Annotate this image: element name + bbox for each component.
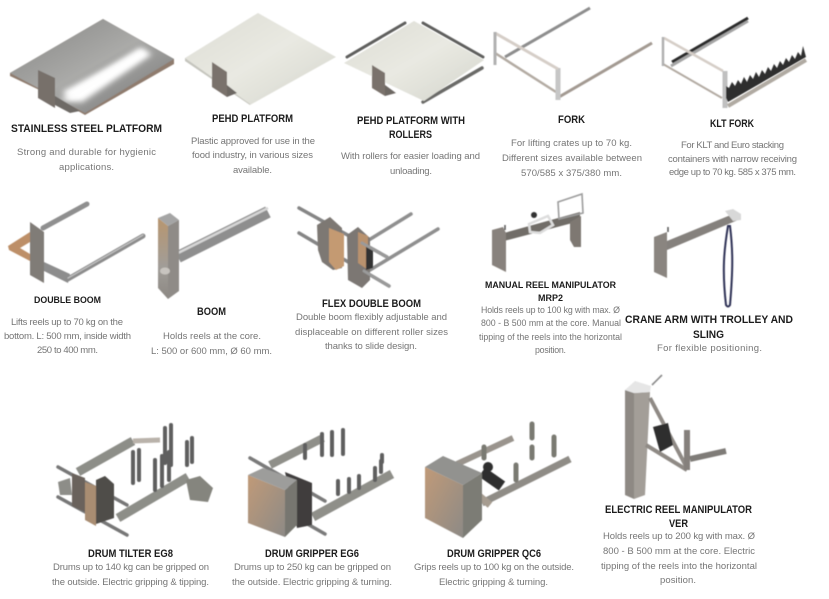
title: VER bbox=[669, 518, 688, 530]
description: 800 - B 500 mm at the core. Electric bbox=[603, 546, 755, 557]
description: 800 - B 500 mm at the core. Manual bbox=[481, 318, 621, 328]
description: unloading. bbox=[390, 166, 432, 177]
description bbox=[601, 531, 757, 586]
title: DOUBLE BOOM bbox=[34, 295, 101, 306]
title bbox=[625, 314, 793, 341]
title: MANUAL REEL MANIPULATOR bbox=[485, 280, 616, 291]
description: Grips reels up to 100 kg on the outside. bbox=[414, 562, 574, 573]
icon: drum gripper QC6 bbox=[425, 424, 570, 538]
item: manual reel manipulator MRP2 bbox=[479, 194, 622, 355]
description: Double boom flexibly adjustable and bbox=[296, 312, 447, 323]
description: position. bbox=[660, 575, 696, 586]
description: edge up to 70 kg. 585 x 375 mm. bbox=[669, 167, 796, 178]
description: the outside. Electric gripping & tipping. bbox=[52, 577, 209, 588]
item: stainless steel platform bbox=[10, 19, 174, 173]
description bbox=[414, 562, 574, 588]
description: With rollers for easier loading and bbox=[341, 151, 480, 162]
description bbox=[502, 138, 642, 179]
title: ROLLERS bbox=[389, 129, 432, 141]
description: applications. bbox=[59, 162, 114, 173]
icon: electric reel manipulator bbox=[625, 375, 726, 499]
description bbox=[151, 331, 272, 357]
title: ELECTRIC REEL MANIPULATOR bbox=[605, 504, 752, 516]
title: CRANE ARM WITH TROLLEY AND bbox=[625, 314, 793, 326]
description: L: 500 or 600 mm, Ø 60 mm. bbox=[151, 346, 272, 357]
title: MRP2 bbox=[538, 293, 563, 304]
title: PEHD PLATFORM bbox=[212, 113, 293, 125]
title: DRUM GRIPPER EG6 bbox=[265, 548, 359, 560]
title: SLING bbox=[693, 329, 724, 341]
item: drum tilter EG8 bbox=[52, 425, 213, 588]
icon: flex double boom bbox=[299, 208, 438, 288]
item: drum gripper EG6 bbox=[232, 430, 392, 588]
description: displaceable on different roller sizes bbox=[295, 327, 448, 338]
description: tipping of the reels into the horizontal bbox=[601, 561, 757, 572]
description bbox=[52, 562, 209, 588]
description: Holds reels up to 100 kg with max. Ø bbox=[481, 305, 620, 315]
title: BOOM bbox=[197, 306, 226, 318]
description: position. bbox=[535, 345, 566, 355]
description: Holds reels at the core. bbox=[163, 331, 261, 342]
item: flex double boom bbox=[295, 208, 448, 352]
description: For KLT and Euro stacking bbox=[681, 140, 784, 151]
description: available. bbox=[233, 165, 272, 176]
item: PEHD platform bbox=[185, 13, 336, 176]
icon: double boom bbox=[8, 204, 143, 283]
description: Electric gripping & turning. bbox=[439, 577, 548, 588]
title: DRUM TILTER EG8 bbox=[88, 548, 173, 560]
description: Drums up to 250 kg can be gripped on bbox=[234, 562, 391, 573]
description: bottom. L: 500 mm, inside width bbox=[4, 331, 131, 342]
item: fork bbox=[495, 8, 652, 179]
description bbox=[295, 312, 448, 352]
icon: drum tilter bbox=[58, 425, 213, 535]
icon: drum gripper EG6 bbox=[248, 430, 392, 537]
icon: PEHD platform with rollers bbox=[344, 21, 484, 102]
description: containers with narrow receiving bbox=[668, 154, 797, 165]
title: STAINLESS STEEL PLATFORM bbox=[11, 123, 162, 135]
description bbox=[668, 140, 797, 178]
title bbox=[605, 504, 752, 530]
item: double boom bbox=[4, 204, 143, 356]
description: the outside. Electric gripping & turning. bbox=[232, 577, 392, 588]
description: Holds reels up to 200 kg with max. Ø bbox=[603, 531, 756, 542]
description: Different sizes available between bbox=[502, 153, 642, 164]
icon: fork bbox=[495, 8, 652, 100]
item: drum gripper QC6 bbox=[414, 424, 574, 588]
icon: boom bbox=[158, 208, 268, 299]
title: FORK bbox=[558, 114, 585, 126]
description: For flexible positioning. bbox=[657, 343, 762, 354]
description: Plastic approved for use in the bbox=[191, 136, 315, 147]
title: PEHD PLATFORM WITH bbox=[357, 115, 465, 127]
title bbox=[357, 115, 465, 141]
item: KLT fork bbox=[663, 18, 806, 178]
description: Strong and durable for hygienic bbox=[17, 147, 156, 158]
description: food industry, in various sizes bbox=[192, 150, 313, 161]
title: FLEX DOUBLE BOOM bbox=[322, 298, 421, 310]
description bbox=[232, 562, 392, 588]
description bbox=[479, 305, 622, 355]
description: 250 to 400 mm. bbox=[37, 345, 98, 356]
icon: KLT fork bbox=[663, 18, 806, 108]
item: electric reel manipulator VER bbox=[601, 375, 757, 586]
icon: PEHD platform bbox=[185, 13, 336, 105]
description: tipping of the reels into the horizontal bbox=[479, 332, 622, 342]
icon: crane arm with sling bbox=[654, 209, 741, 306]
description: thanks to slide design. bbox=[325, 341, 417, 352]
description bbox=[17, 147, 156, 173]
description: For lifting crates up to 70 kg. bbox=[511, 138, 632, 149]
title bbox=[485, 280, 616, 304]
title: KLT FORK bbox=[710, 118, 754, 130]
description bbox=[4, 317, 131, 356]
icon: manual reel manipulator bbox=[492, 194, 583, 272]
title: DRUM GRIPPER QC6 bbox=[447, 548, 541, 560]
item: PEHD platform with rollers bbox=[341, 21, 484, 177]
description: Lifts reels up to 70 kg on the bbox=[11, 317, 123, 328]
description bbox=[341, 151, 480, 177]
description: 570/585 x 375/380 mm. bbox=[521, 168, 622, 179]
description bbox=[191, 136, 315, 176]
item: crane arm with trolley and sling bbox=[625, 209, 793, 354]
item: boom bbox=[151, 208, 272, 357]
description: Drums up to 140 kg can be gripped on bbox=[53, 562, 209, 573]
icon: stainless steel platform bbox=[10, 19, 174, 115]
